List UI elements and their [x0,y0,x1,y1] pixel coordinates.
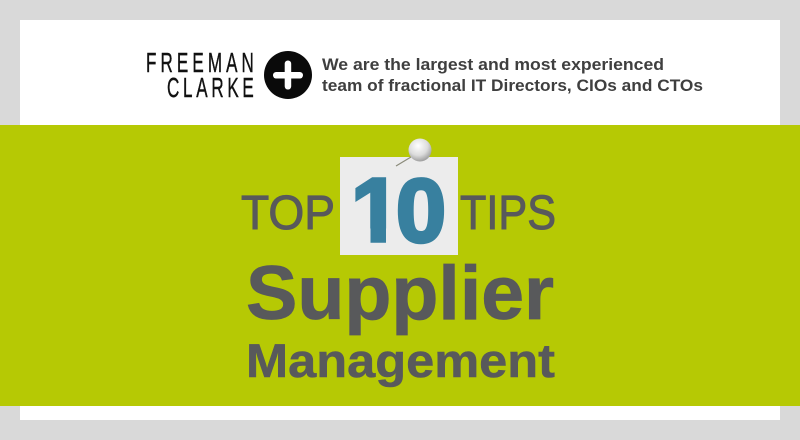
note card with number 10 [340,157,458,262]
tagline [322,55,703,95]
icon: plus circle [264,51,312,99]
tagline: We are the largest and most experienced [322,55,664,74]
note card with number 10: 0 [396,162,446,262]
logo wordmark: FREEMAN [146,47,254,78]
heading: supplier: Supplier [246,251,554,336]
tagline: team of fractional IT Directors, CIOs and CTOs [322,76,703,95]
logo wordmark [146,47,254,103]
green panel [0,125,800,406]
heading: tips: TIPS [460,187,556,240]
icon: push pin [396,138,432,166]
note card with number 10: 1 [351,161,401,261]
logo wordmark: CLARKE [167,72,254,103]
heading: top: TOP [241,187,335,240]
heading: management: Management [246,334,555,387]
logo: Freeman Clarke [146,47,312,103]
